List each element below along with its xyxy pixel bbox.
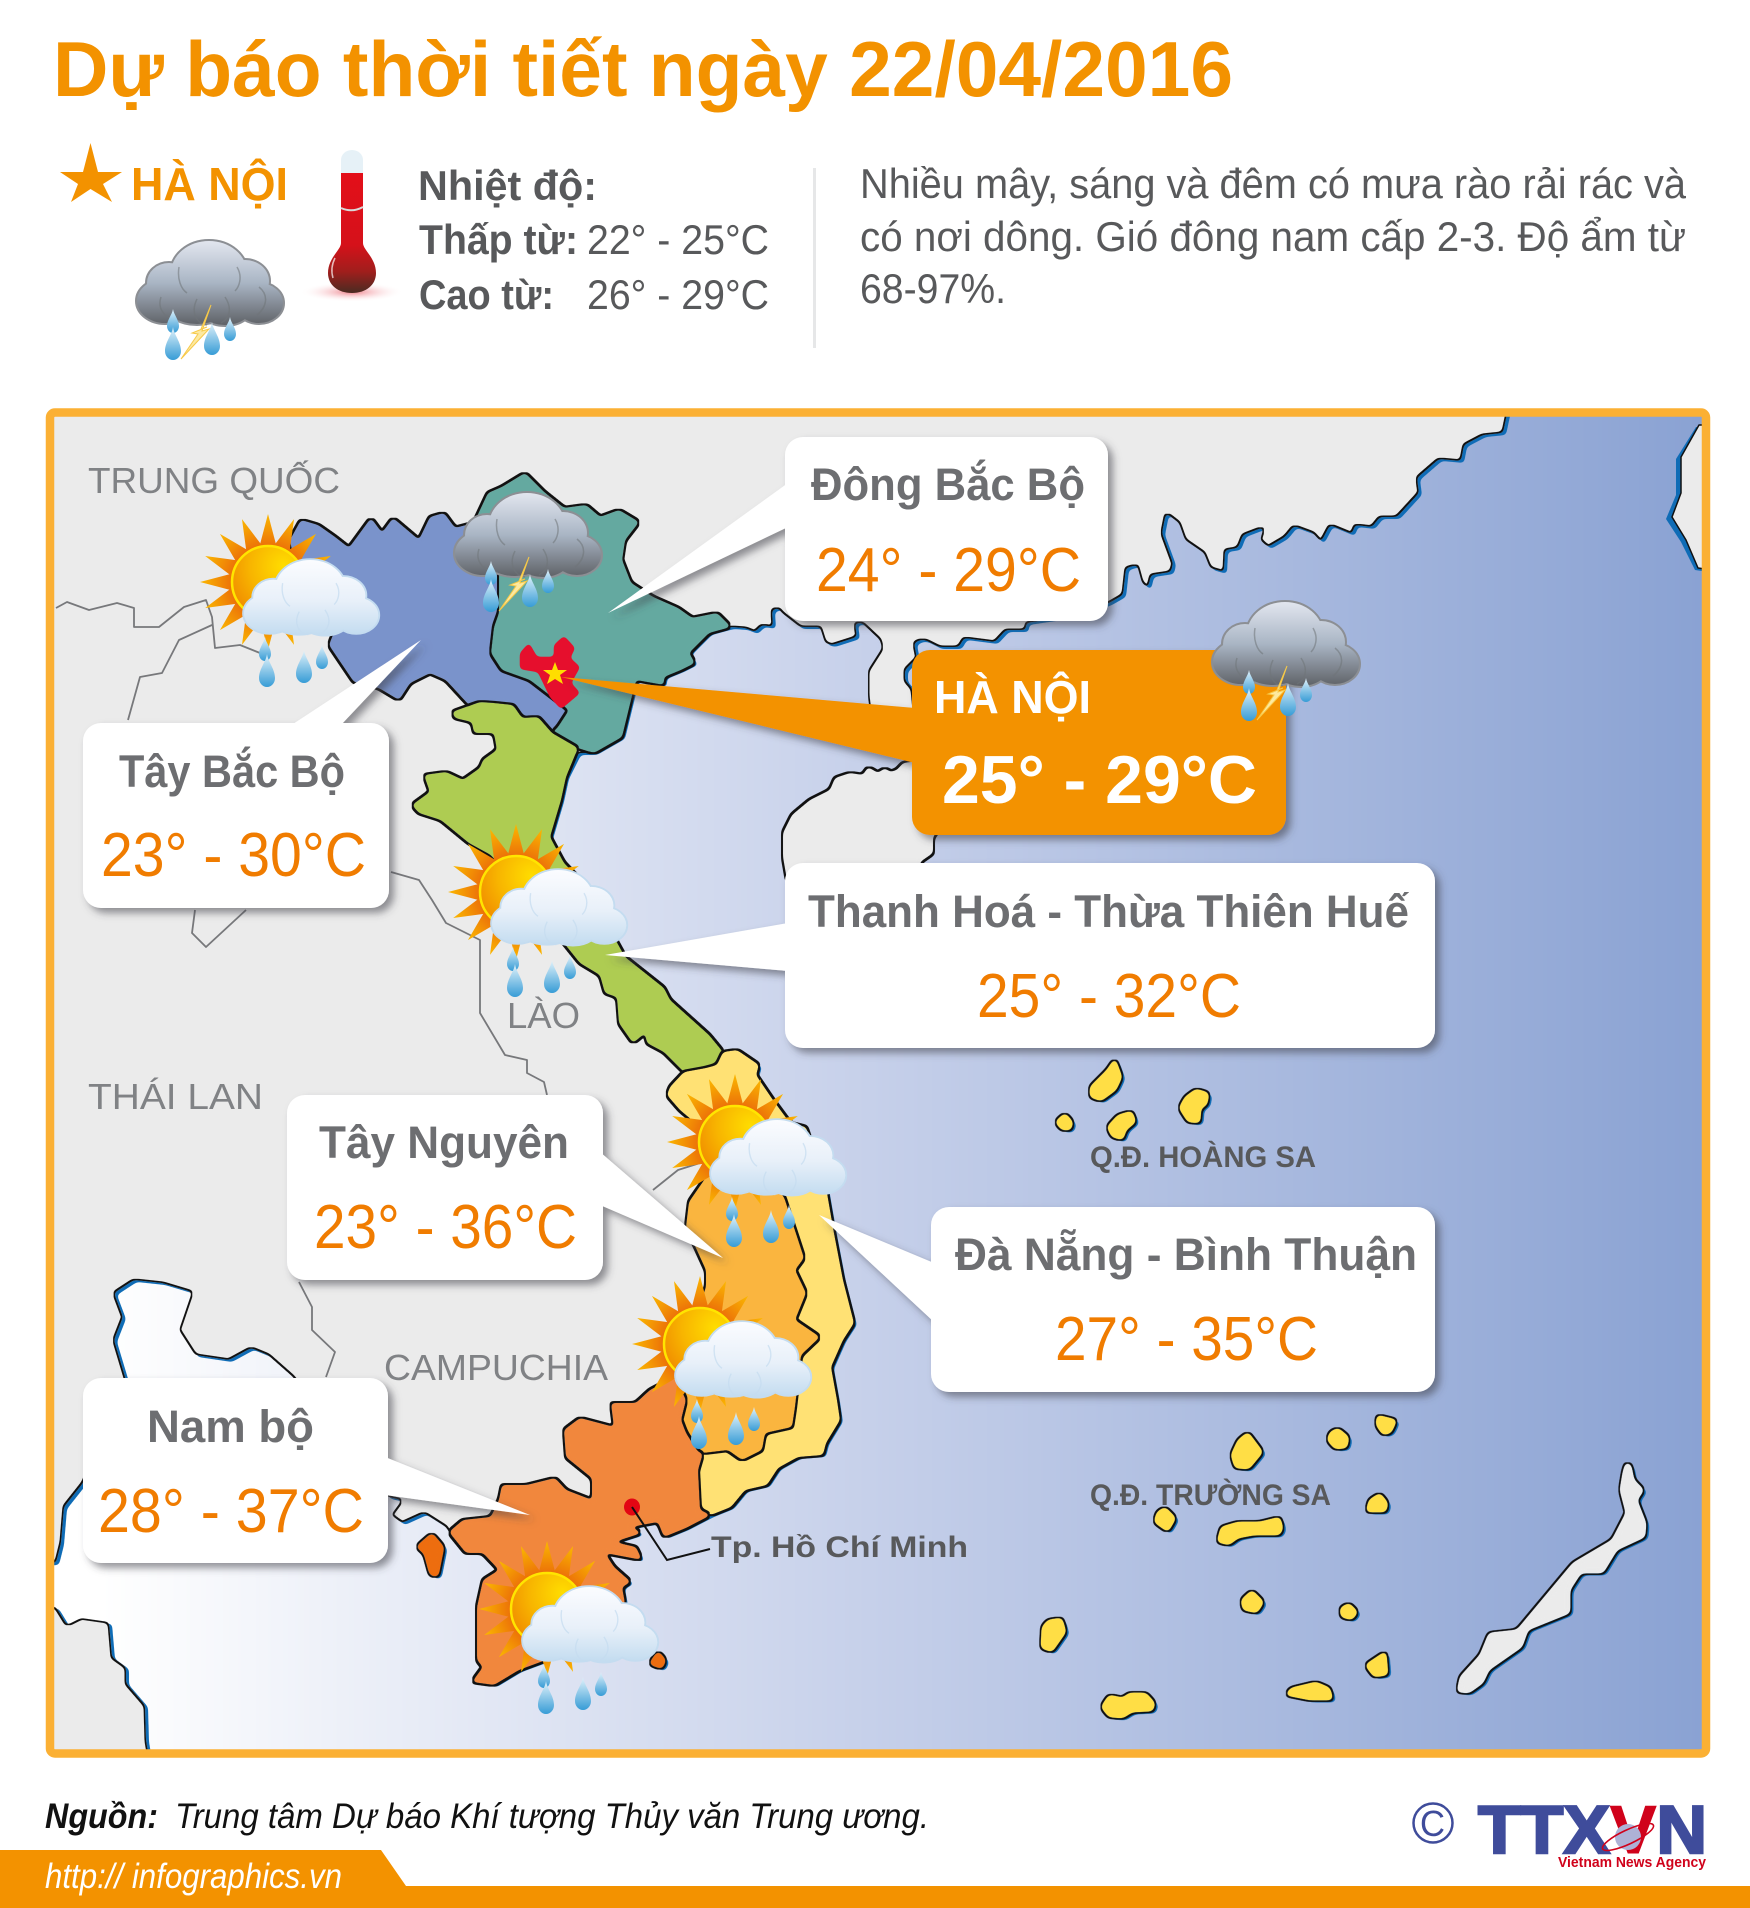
callout: Tay Nguyen: 23° - 36°C — [314, 1193, 577, 1262]
region: Dong Bac — [474, 473, 731, 753]
high temperature value: 26° - 29°C — [587, 271, 769, 318]
temperature label: Nhiệt độ: — [418, 162, 597, 209]
callout: Da Nang - Binh Thuan — [819, 1207, 1435, 1392]
icon: sun cloud Tay Nguyen — [632, 1276, 810, 1449]
forecast description: 68-97%. — [860, 265, 1006, 312]
forecast description: có nơi dông. Gió đông nam cấp 2-3. Độ ẩm từ — [860, 213, 1686, 260]
callout: Hanoi — [561, 650, 1286, 835]
label: Truong Sa: Q.Đ. TRƯỜNG SA — [1090, 1478, 1331, 1512]
logo: TTXVN: Vietnam News Agency — [1558, 1854, 1707, 1871]
high temperature label: Cao từ: — [419, 271, 554, 318]
label: Hoang Sa: Q.Đ. HOÀNG SA — [1090, 1140, 1316, 1174]
label: Cambodia: CAMPUCHIA — [384, 1347, 608, 1388]
icon: star — [60, 143, 122, 202]
callout: Dong Bac Bo — [608, 437, 1108, 621]
heading: Hanoi: HÀ NỘI — [131, 158, 288, 210]
icon: storm over Hanoi — [1213, 602, 1359, 721]
icon: storm over north-east — [455, 493, 601, 612]
callout: Thanh Hoa - Thua Thien Hue: Thanh Hoá - Thừa Thiên Huế — [808, 886, 1410, 937]
callout: Nam Bo — [83, 1378, 530, 1563]
icon: sun cloud Tay Bac — [200, 514, 378, 687]
callout: Da Nang - Binh Thuan: Đà Nẵng - Bình Thuận — [955, 1229, 1417, 1280]
label: Laos: LÀO — [507, 995, 580, 1036]
callout: Dong Bac Bo: 24° - 29°C — [816, 536, 1081, 605]
region: Hanoi — [520, 636, 580, 709]
callout: Da Nang - Binh Thuan: 27° - 35°C — [1055, 1305, 1318, 1374]
label: China: TRUNG QUỐC — [88, 459, 340, 501]
icon: copyright: C — [1420, 1803, 1445, 1844]
callout: Tay Nguyen: Tây Nguyên — [319, 1117, 569, 1168]
callout: Hanoi: HÀ NỘI — [934, 671, 1091, 723]
island: Palawan — [1457, 1462, 1646, 1693]
low temperature value: 22° - 25°C — [587, 216, 769, 263]
marker: Ho Chi Minh City — [624, 1498, 968, 1564]
callout: Thanh Hoa - Thua Thien Hue: 25° - 32°C — [977, 962, 1241, 1031]
callout: Tay Bac Bo: 23° - 30°C — [101, 821, 366, 890]
label: Thailand: THÁI LAN — [88, 1076, 263, 1117]
logo: TTXVN: TTXVN — [1478, 1792, 1707, 1868]
frame — [50, 412, 1706, 1754]
region: Nam Bo — [449, 1377, 711, 1685]
source note: Trung tâm Dự báo Khí tượng Thủy văn Trung ương. — [175, 1797, 929, 1836]
icon: storm cloud — [137, 241, 283, 360]
callout: Thanh Hoa - Thua Thien Hue — [605, 863, 1435, 1048]
icon: thermometer — [300, 150, 404, 302]
source note: Nguồn: — [45, 1797, 158, 1836]
low temperature label: Thấp từ: — [419, 216, 578, 263]
panel: map — [20, 385, 1740, 1775]
marker: Ho Chi Minh City: Tp. Hồ Chí Minh — [711, 1531, 968, 1564]
callout: Nam Bo: Nam bộ — [147, 1401, 314, 1452]
title: Dự báo thời tiết ngày 22/04/2016 — [53, 25, 1233, 113]
islands: Truong Sa — [1041, 1415, 1397, 1718]
islands: south coast — [416, 1533, 666, 1669]
callout: Tay Nguyen — [287, 1095, 723, 1280]
footer bar: http:// infographics.vn — [45, 1857, 342, 1896]
icon: star on Hanoi — [543, 662, 567, 684]
icon: copyright — [1414, 1803, 1452, 1844]
callout: Hanoi: 25° - 29°C — [942, 742, 1257, 818]
icon: sun cloud Thanh Hoa — [448, 824, 626, 997]
region: Da Nang - Binh Thuan — [667, 1050, 854, 1515]
region: Thanh Hoa - Hue — [412, 702, 723, 1072]
icon: sun cloud Da Nang — [667, 1074, 845, 1247]
forecast description — [860, 160, 1687, 312]
region: Tay Bac — [290, 513, 569, 733]
panel: Hanoi summary — [60, 143, 769, 360]
callout: Nam Bo: 28° - 37°C — [98, 1477, 364, 1546]
callout: Dong Bac Bo: Đông Bắc Bộ — [811, 459, 1085, 510]
icon: sun cloud Nam Bo — [479, 1541, 657, 1714]
region: Tay Nguyen — [682, 1177, 820, 1462]
callout: Tay Bac Bo — [83, 640, 421, 908]
forecast description: Nhiều mây, sáng và đêm có mưa rào rải rác và — [860, 160, 1687, 207]
footer bar — [0, 1850, 1750, 1908]
callout: Tay Bac Bo: Tây Bắc Bộ — [119, 746, 345, 797]
islands: Hoang Sa — [1055, 1058, 1209, 1140]
